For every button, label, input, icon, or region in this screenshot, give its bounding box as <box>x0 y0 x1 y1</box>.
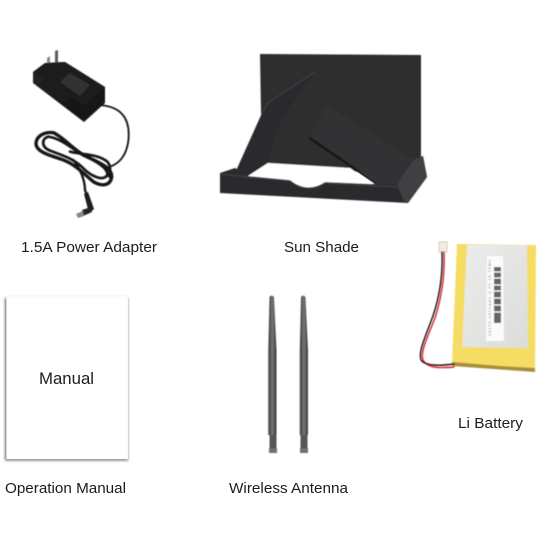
battery wires <box>420 252 454 368</box>
antenna right <box>300 296 308 453</box>
battery connector <box>439 242 447 252</box>
label: Operation Manual: Operation Manual <box>5 480 126 497</box>
adapter cable <box>36 105 129 208</box>
manual cover text: Manual <box>39 369 94 388</box>
adapter prongs <box>47 50 58 74</box>
label: Sun Shade: Sun Shade <box>284 239 359 256</box>
shade right flap <box>309 105 413 185</box>
icon: Li battery <box>420 242 536 372</box>
label: Li Battery: Li Battery <box>458 415 523 432</box>
icon: wireless antennas <box>268 296 308 453</box>
label: 1.5A Power Adapter: 1.5A Power Adapter <box>21 239 157 256</box>
shade tray <box>220 156 427 203</box>
battery bottom edge <box>452 362 535 372</box>
icon: power adapter <box>33 50 129 218</box>
adapter DC plug <box>76 192 94 218</box>
antenna left <box>268 296 277 453</box>
battery label: 4S375-2200mAh 3.7V 16.75Wh <box>488 260 492 336</box>
adapter body <box>33 62 105 122</box>
label: Wireless Antenna: Wireless Antenna <box>229 480 349 497</box>
icon: sun shade <box>220 54 427 203</box>
shade opening <box>248 163 373 187</box>
battery pack <box>452 244 536 372</box>
battery silver panel <box>462 245 528 348</box>
shade left flap <box>235 72 315 176</box>
panel: operation manual booklet <box>5 296 128 460</box>
shade back panel <box>260 54 421 175</box>
